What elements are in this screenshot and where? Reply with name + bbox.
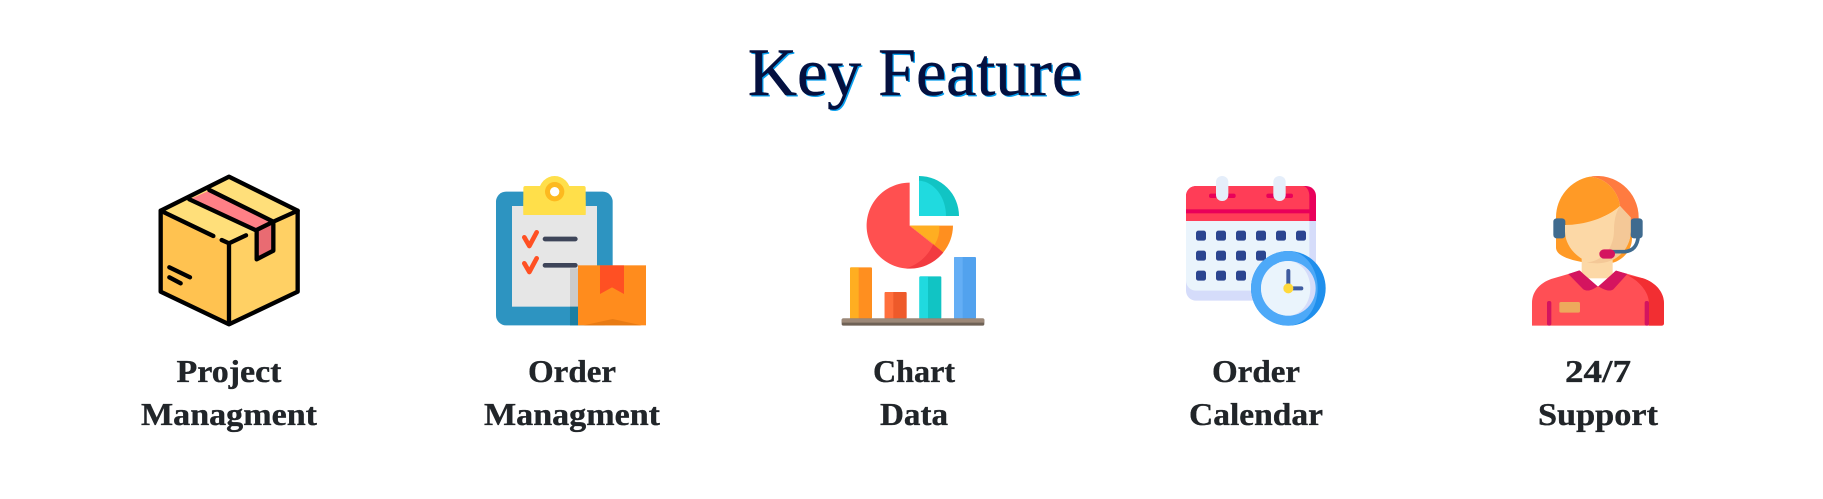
feature: chart data (842, 176, 984, 432)
label: Order Calendar: Order (1212, 353, 1300, 389)
feature: 24/7 support (1532, 176, 1664, 432)
icon: support agent with headset (1532, 176, 1664, 326)
label: 24/7 Support (1538, 353, 1658, 432)
label: Order Calendar: Calendar (1189, 396, 1323, 432)
title: Key Feature (748, 34, 1082, 110)
feature: order calendar (1186, 176, 1326, 432)
feature: order management (484, 176, 660, 432)
label: Chart Data (873, 353, 955, 432)
label: Order Managment: Managment (484, 396, 660, 432)
label: 24/7 Support: 24/7 (1565, 353, 1631, 389)
label: Chart Data: Data (880, 396, 948, 432)
icon: clipboard with parcel (496, 176, 646, 325)
icon: cardboard box (161, 177, 298, 324)
label: Order Managment: Order (528, 353, 616, 389)
label: Project Managment (141, 353, 317, 432)
label: Chart Data: Chart (873, 353, 955, 389)
label: Project Managment: Managment (141, 396, 317, 432)
label: 24/7 Support: Support (1538, 396, 1658, 432)
label: Order Calendar (1189, 353, 1323, 432)
label: Project Managment: Project (176, 353, 282, 389)
icon: pie and bar chart (842, 176, 984, 326)
feature: project management (141, 177, 317, 432)
label: Order Managment (484, 353, 660, 432)
icon: calendar with clock (1186, 176, 1326, 326)
